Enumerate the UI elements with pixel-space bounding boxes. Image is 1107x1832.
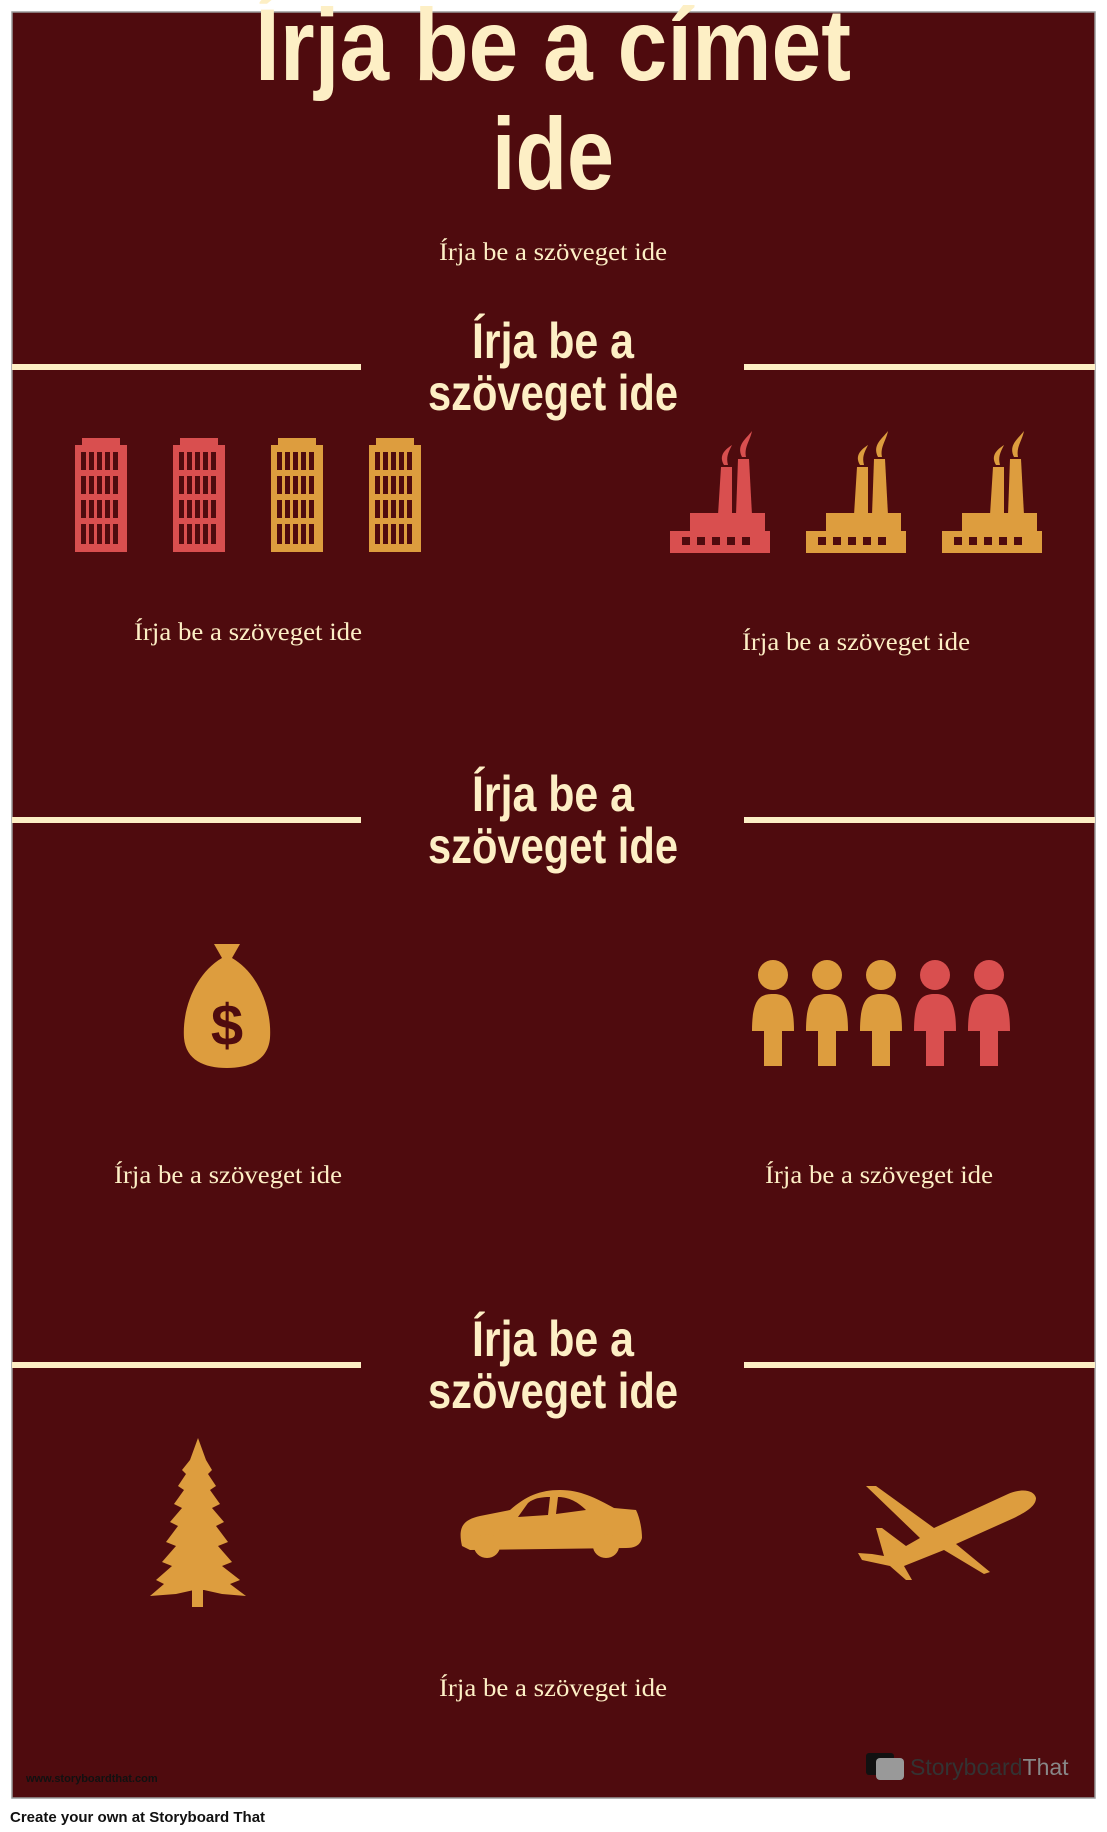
heading: section 3: [428, 1311, 678, 1419]
title: ide: [492, 97, 614, 211]
icon: buildings: [75, 438, 421, 552]
icon: airplane: [858, 1486, 1036, 1580]
icon: tree: [150, 1438, 246, 1607]
text: website: www.storyboardthat.com: [25, 1773, 158, 1785]
heading: section 1: [428, 313, 678, 421]
icon: money bag: $: [211, 993, 243, 1058]
heading: section 2: szöveget ide: [428, 818, 678, 874]
icon: car: [461, 1490, 642, 1558]
title: [255, 0, 851, 211]
text: money caption: Írja be a szöveget ide: [114, 1161, 342, 1189]
icon: factories: [670, 431, 1042, 553]
heading: section 3: szöveget ide: [428, 1363, 678, 1419]
heading: section 2: [428, 766, 678, 874]
heading: section 3: Írja be a: [472, 1311, 635, 1367]
text: buildings caption: Írja be a szöveget ide: [134, 618, 362, 646]
text: people caption: Írja be a szöveget ide: [765, 1161, 993, 1189]
heading: section 2: Írja be a: [472, 766, 635, 822]
text: factories caption: Írja be a szöveget ide: [742, 628, 970, 656]
subtitle: Írja be a szöveget ide: [439, 238, 667, 266]
text: transport caption: Írja be a szöveget ide: [439, 1674, 667, 1702]
heading: section 1: szöveget ide: [428, 365, 678, 421]
footer text: Create your own at Storyboard That: [10, 1809, 265, 1826]
icon: money bag: [184, 944, 270, 1068]
icon: people: [752, 960, 1010, 1066]
heading: section 1: Írja be a: [472, 313, 635, 369]
logo: StoryboardThat: StoryboardThat: [910, 1754, 1069, 1780]
